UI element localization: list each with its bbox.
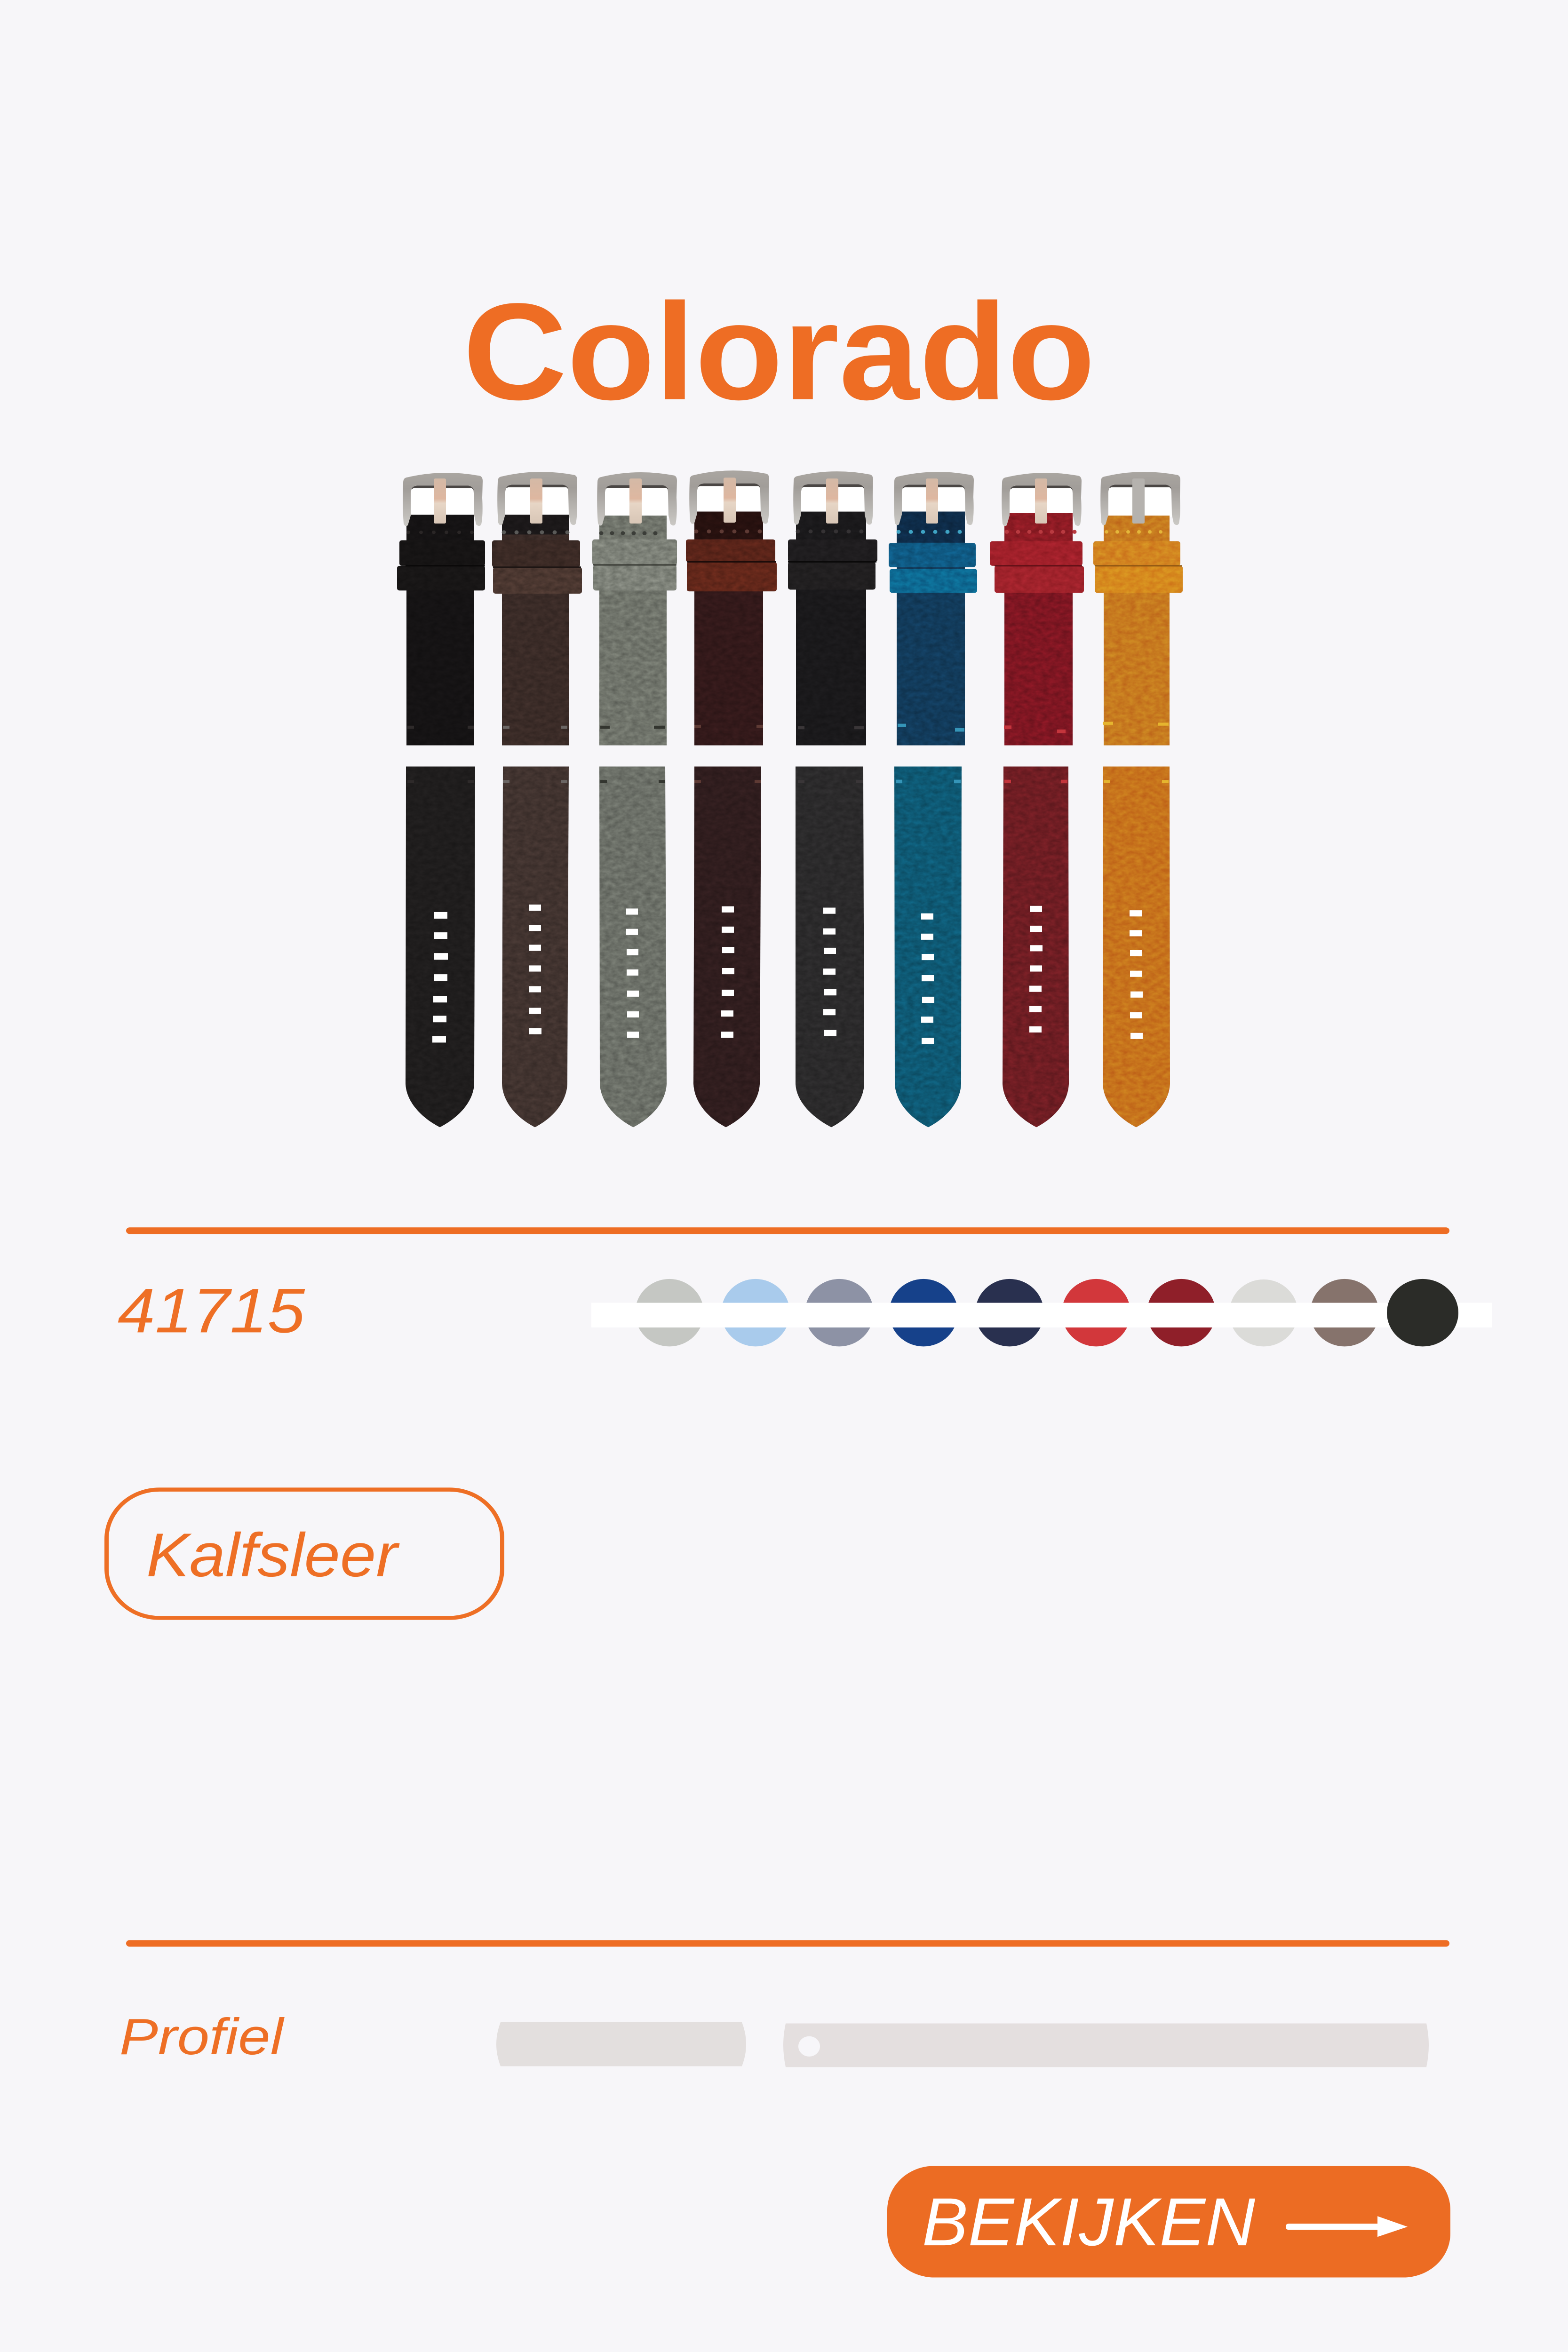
title: Colorado bbox=[463, 275, 1095, 429]
strap 7: burgundy red bbox=[990, 473, 1084, 1127]
strap 1: black bbox=[397, 473, 485, 1127]
product image: eight leather straps bbox=[397, 470, 1183, 1127]
white band across swatches bbox=[591, 1303, 1492, 1327]
strap 4: brown bbox=[686, 470, 777, 1127]
strap 3: grey bbox=[592, 472, 677, 1127]
profile illustration bbox=[496, 2022, 1429, 2067]
arrow bbox=[1286, 2216, 1408, 2237]
tag outline bbox=[106, 1490, 502, 1618]
swatch row bbox=[635, 1279, 1379, 1346]
strap 5: black bbox=[788, 471, 877, 1127]
colour swatches bbox=[591, 1279, 1492, 1346]
article number: 41715 bbox=[118, 1276, 305, 1346]
tag label: Kalfsleer bbox=[146, 1520, 400, 1589]
material tag bbox=[106, 1490, 502, 1618]
profile bar hole bbox=[798, 2036, 820, 2057]
divider line bottom bbox=[126, 1940, 1449, 1947]
strap 6: petrol blue bbox=[889, 472, 977, 1127]
strap 2: dark brown-grey bbox=[492, 472, 582, 1127]
button background bbox=[887, 2166, 1450, 2278]
profile bar long bbox=[783, 2024, 1429, 2067]
swatch: black selected bbox=[1387, 1279, 1458, 1346]
profile label: Profiel bbox=[119, 2008, 285, 2065]
button: bekijken bbox=[887, 2166, 1450, 2278]
button label: BEKIJKEN bbox=[922, 2184, 1255, 2260]
profile bar short bbox=[496, 2022, 746, 2066]
strap 8: tan ochre bbox=[1093, 472, 1183, 1127]
divider line top bbox=[126, 1227, 1449, 1234]
